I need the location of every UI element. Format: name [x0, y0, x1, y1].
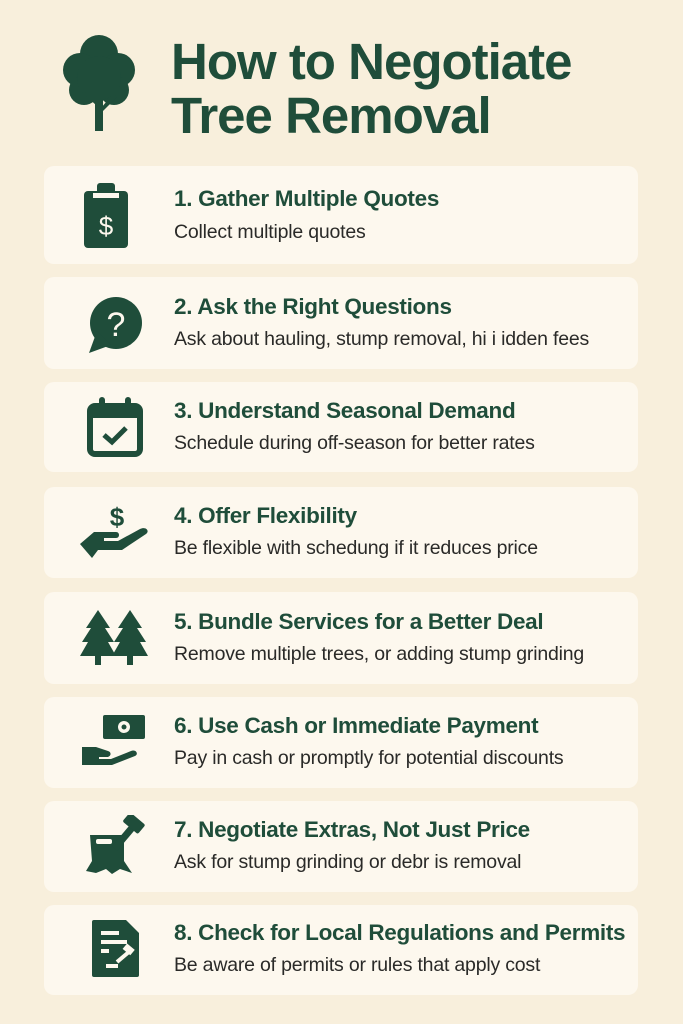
panel: step 4: [44, 487, 638, 578]
icon: question bubble: ?: [107, 306, 125, 344]
panel: step 3: [44, 382, 638, 472]
icon: cash in hand: [82, 715, 145, 765]
heading: 8. Check for Local Regulations and Permits: [174, 920, 625, 945]
text: Be aware of permits or rules that apply cost: [174, 954, 540, 976]
icon: two pine trees: [80, 610, 148, 665]
text: Collect multiple quotes: [174, 221, 366, 243]
heading: 6. Use Cash or Immediate Payment: [174, 713, 538, 738]
icon: permit document: [92, 920, 139, 977]
panel: step 1: [44, 166, 638, 264]
text: Ask for stump grinding or debr is removal: [174, 851, 521, 873]
panel: step 8: [44, 905, 638, 995]
icon: hand with dollar: $: [110, 502, 125, 532]
heading: 7. Negotiate Extras, Not Just Price: [174, 817, 530, 842]
icon: clipboard dollar: [84, 183, 128, 248]
heading: 3. Understand Seasonal Demand: [174, 398, 515, 423]
panel: step 6: [44, 697, 638, 788]
icon: stump and axe: [86, 815, 145, 874]
panel: step 5: [44, 592, 638, 684]
text: Ask about hauling, stump removal, hi i idden fees: [174, 328, 589, 350]
title: [171, 33, 572, 144]
panel: step 7: [44, 801, 638, 892]
heading: 4. Offer Flexibility: [174, 503, 357, 528]
heading: 2. Ask the Right Questions: [174, 294, 452, 319]
heading: 1. Gather Multiple Quotes: [174, 186, 439, 211]
icon: tree logo: [63, 35, 135, 131]
icon: hand with dollar: [80, 502, 148, 558]
icon: question bubble: [89, 297, 142, 353]
text: Remove multiple trees, or adding stump grinding: [174, 643, 584, 665]
title: How to Negotiate: [171, 33, 572, 90]
text: Pay in cash or promptly for potential discounts: [174, 747, 563, 769]
text: Be flexible with schedung if it reduces price: [174, 537, 538, 559]
icon: calendar check: [87, 397, 143, 457]
text: Schedule during off-season for better rates: [174, 432, 535, 454]
panel: step 2: [44, 277, 638, 369]
icon: clipboard dollar: $: [99, 211, 114, 241]
heading: 5. Bundle Services for a Better Deal: [174, 609, 543, 634]
title: Tree Removal: [171, 87, 491, 144]
